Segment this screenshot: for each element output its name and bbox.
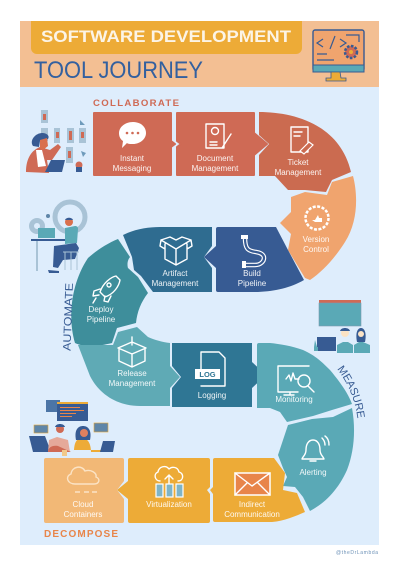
step: version control: Control [303, 245, 329, 254]
illustration: woman at laptop with cards [26, 110, 86, 173]
illustration: two developers with code [29, 400, 115, 456]
icon: log file [201, 352, 225, 386]
step: release management: Release [117, 369, 147, 378]
step: indirect communication: Indirect [239, 500, 266, 509]
step: version control: Version [303, 235, 329, 244]
section heading: decompose: DECOMPOSE [44, 529, 118, 540]
icon: bell [302, 436, 329, 461]
step: logging [172, 343, 266, 407]
step: deploy pipeline: Pipeline [87, 315, 116, 324]
icon: rocket [93, 276, 120, 303]
step: cloud containers [44, 458, 124, 523]
step: ticket management [259, 112, 351, 192]
icon: cloud with servers [155, 467, 183, 490]
step: alerting: Alerting [299, 468, 327, 477]
step: document management [177, 113, 267, 175]
step: monitoring: Monitoring [275, 395, 313, 404]
step: ticket management: Management [275, 168, 322, 177]
icon: envelope [235, 473, 270, 495]
credit: @theDrLambda [336, 550, 378, 556]
icon: gear with thumb [306, 206, 328, 230]
step: cloud containers: Cloud [73, 500, 93, 509]
section heading: measure: MEASURE [338, 365, 365, 418]
icon: box with arrow [118, 337, 146, 367]
section heading: automate: AUTOMATE [62, 283, 76, 351]
header band [20, 21, 379, 87]
step: document management: Document [197, 154, 234, 163]
step: release management [78, 327, 180, 406]
icon: chat bubble [119, 122, 146, 148]
title bar: SOFTWARE DEVELOPMENT [41, 27, 292, 46]
body panel [20, 87, 379, 545]
step: virtualization: Virtualization [146, 500, 192, 509]
subtitle: TOOL JOURNEY [34, 57, 203, 84]
step: instant messaging: Messaging [113, 164, 151, 173]
step: indirect communication [210, 458, 305, 522]
step: instant messaging [94, 113, 175, 175]
step: monitoring [257, 343, 352, 422]
step: ticket management: Ticket [287, 158, 309, 167]
step: virtualization [117, 458, 210, 523]
step: artifact management [123, 227, 212, 292]
illustration: man at desk with gears [31, 202, 85, 273]
step: cloud containers: Containers [64, 510, 102, 519]
title bar [31, 21, 302, 54]
step: version control [280, 176, 356, 280]
icon: monitor with magnifier [278, 366, 309, 395]
step: artifact management: Management [152, 279, 199, 288]
icon: open box [160, 237, 192, 265]
step: document management: Management [192, 164, 239, 173]
step: indirect communication: Communication [224, 510, 280, 519]
step: deploy pipeline [71, 239, 148, 346]
step: release management: Management [109, 379, 156, 388]
step: build pipeline [204, 227, 304, 292]
section heading: collaborate: COLLABORATE [93, 98, 180, 109]
step: instant messaging: Instant [120, 154, 145, 163]
icon: cloud [68, 467, 99, 492]
icon: ticket book [291, 127, 308, 152]
step: alerting [278, 408, 354, 511]
icon: monitor with code [313, 30, 364, 81]
step: deploy pipeline: Deploy [89, 305, 113, 314]
step: build pipeline: Pipeline [238, 279, 267, 288]
step: logging: Logging [198, 391, 226, 400]
step: build pipeline: Build [243, 269, 261, 278]
icon: pipe [241, 235, 264, 268]
step: logging: LOG [199, 370, 216, 379]
step: artifact management: Artifact [163, 269, 188, 278]
icon: document with pen [206, 124, 231, 148]
illustration: two people with monitor [314, 300, 370, 353]
